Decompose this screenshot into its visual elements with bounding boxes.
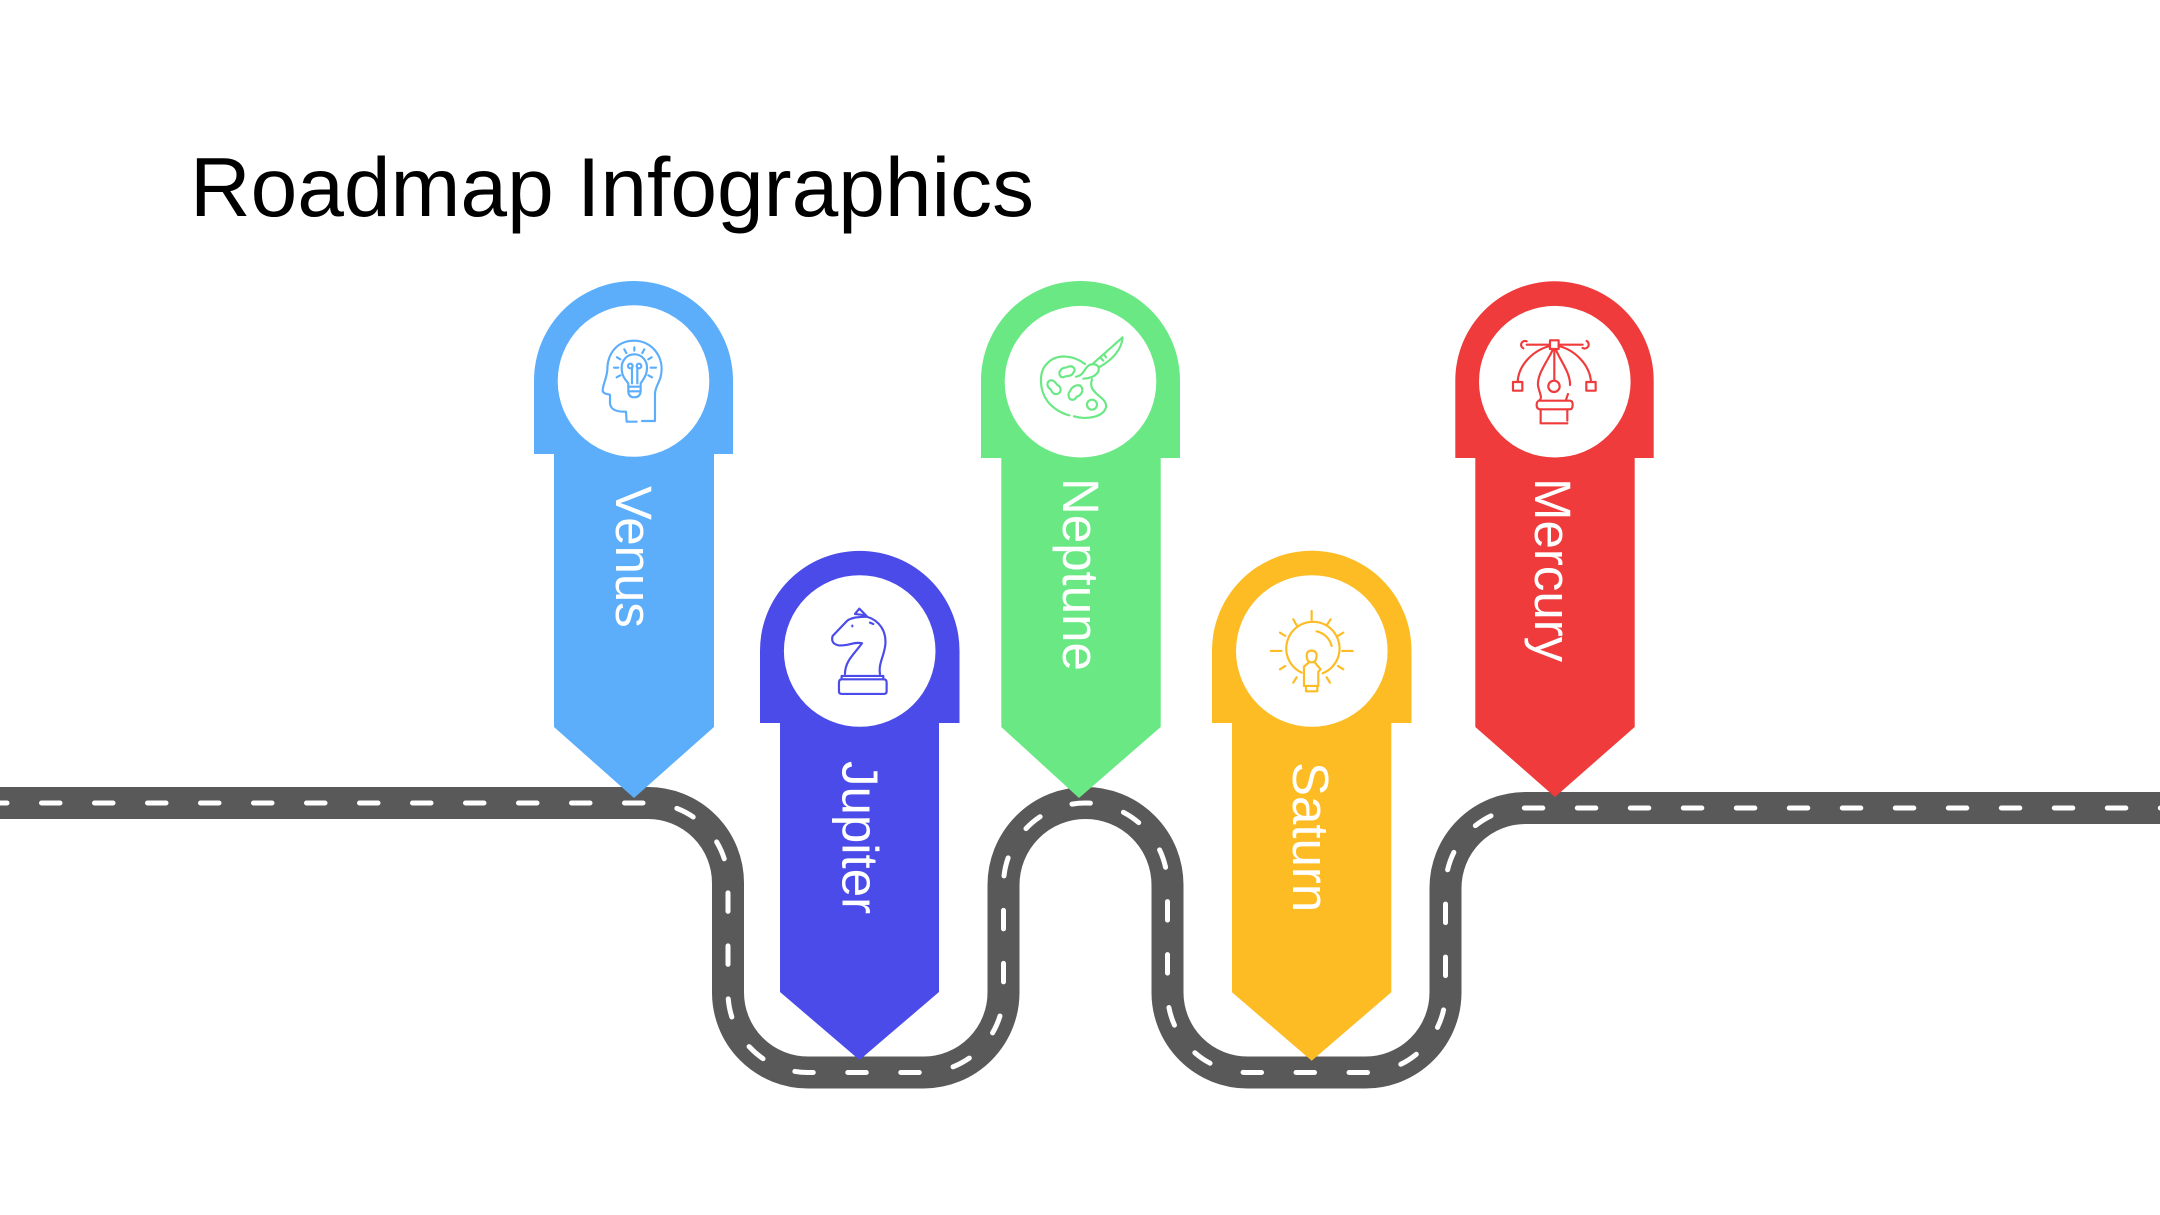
pin: Mercury xyxy=(1455,281,1654,797)
icon: paint palette and brush xyxy=(1041,337,1123,418)
title: Roadmap Infographics xyxy=(190,140,1034,234)
pin: Venus xyxy=(534,281,733,798)
icon: bezier pen tool xyxy=(1513,340,1596,423)
label: Neptune: Neptune xyxy=(1052,478,1109,671)
icon: head with light bulb xyxy=(603,341,662,422)
label: Saturn: Saturn xyxy=(1282,762,1339,912)
pin: Neptune xyxy=(981,281,1180,798)
label: Mercury: Mercury xyxy=(1524,478,1581,663)
pin: Saturn xyxy=(1212,551,1412,1061)
icon: person in light bulb xyxy=(1271,611,1353,691)
label: Venus: Venus xyxy=(605,486,662,628)
label: Jupiter: Jupiter xyxy=(832,761,888,914)
pin: Jupiter xyxy=(760,551,960,1060)
winding road xyxy=(0,803,2160,1072)
icon: chess knight xyxy=(832,609,887,694)
